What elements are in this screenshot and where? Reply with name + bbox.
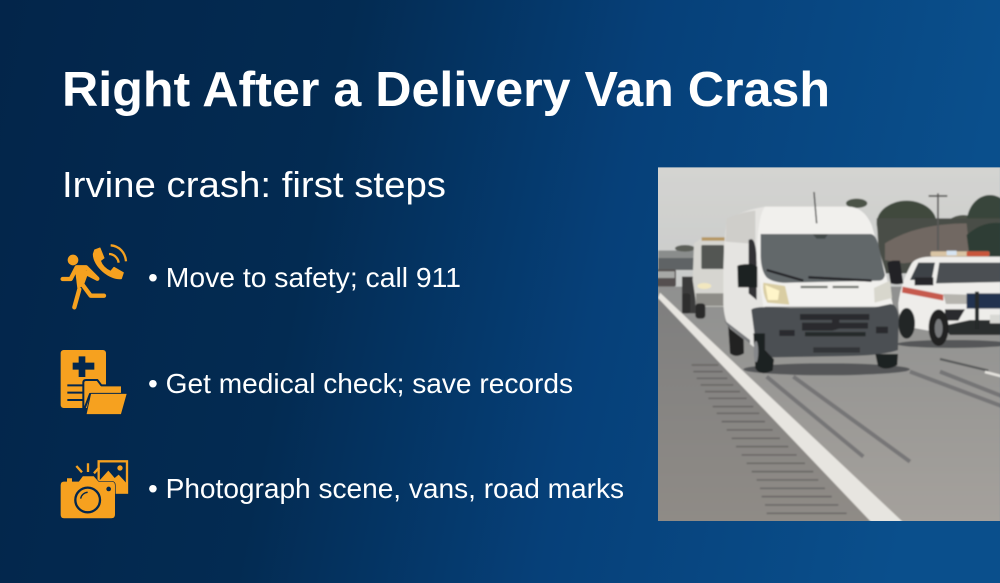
white edge line — [658, 293, 905, 524]
skid marks — [767, 372, 1000, 462]
step 2: medical check — [61, 350, 573, 415]
sky — [658, 167, 1000, 288]
icon: camera and picture — [60, 461, 127, 519]
icon: medical record and folder — [61, 350, 127, 415]
van wheels — [753, 333, 774, 373]
shoulder — [655, 293, 877, 524]
van rear wheel — [728, 323, 744, 356]
distant car — [655, 269, 676, 287]
bullet text: • Photograph scene, vans, road marks — [148, 473, 624, 504]
van front — [757, 207, 893, 307]
step 1: safety and 911 — [63, 245, 461, 307]
photo: white van on highway with police SUV — [655, 164, 1000, 524]
bullet text: • Move to safety; call 911 — [148, 262, 461, 293]
bullet text: • Get medical check; save records — [148, 368, 573, 399]
subtitle: Irvine crash: first steps — [62, 164, 446, 205]
utility pole — [929, 193, 947, 250]
van shadow — [743, 363, 910, 375]
tow truck — [682, 237, 725, 319]
rumble strip — [649, 159, 651, 161]
police SUV — [897, 251, 1000, 348]
icon: running person with phone — [63, 245, 126, 307]
title: Right After a Delivery Van Crash — [62, 63, 830, 117]
delivery van — [723, 192, 903, 373]
van bumper — [751, 304, 899, 357]
van side panel — [723, 207, 765, 350]
trees — [658, 195, 1000, 273]
step 3: photograph — [60, 461, 624, 519]
road — [655, 287, 1000, 524]
